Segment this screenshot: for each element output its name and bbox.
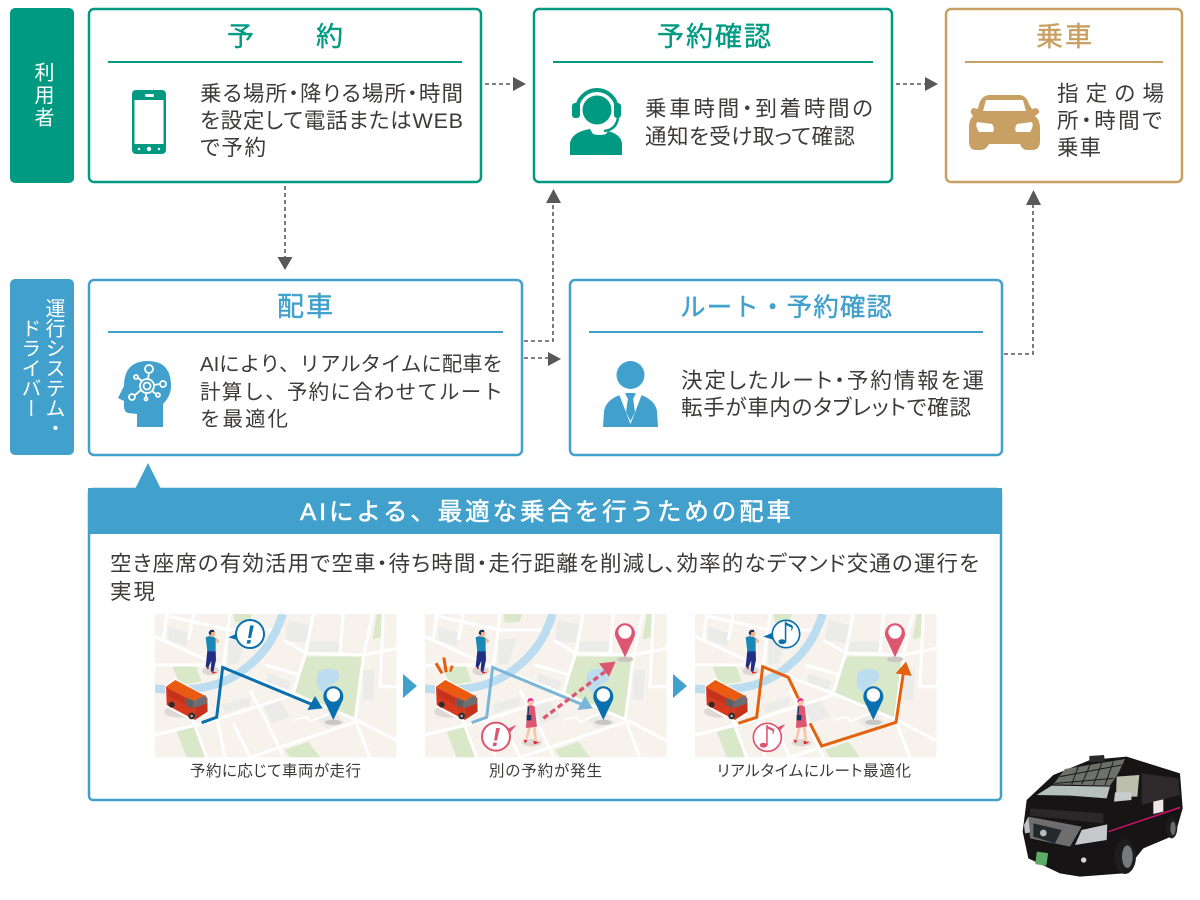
- caption 2: 別の予約が発生: [489, 762, 602, 780]
- heading: 配車: 配車: [277, 292, 333, 322]
- text: 本文: 空き座席の有効活用で空車・待ち時間・走行距離を削減し、効率的なデマンド交通の運行を: [110, 552, 979, 576]
- panel: 予約確認: [534, 9, 892, 182]
- scene 3: リアルタイムにルート最適化: [695, 614, 937, 757]
- heading: 乗車: 乗車: [1036, 22, 1092, 52]
- text: 予約の説明: で予約: [200, 136, 266, 160]
- icon: car: [969, 95, 1040, 150]
- text: ルート説明: 決定したルート・予約情報を運: [681, 369, 984, 393]
- scene 1: 予約に応じて車両が走行: [155, 614, 397, 757]
- panel: 乗車: [946, 9, 1182, 182]
- label: 運行システム・ドライバー: 運行システム・: [42, 298, 65, 438]
- arrow: 予約→配車: [278, 186, 292, 270]
- text: 配車の説明: AIにより、リアルタイムに配車を: [200, 353, 503, 376]
- icon: AI head: [118, 361, 171, 427]
- label: 利用者: [10, 8, 74, 183]
- text: 予約確認の説明: 通知を受け取って確認: [645, 125, 855, 149]
- caption 3: リアルタイムにルート最適化: [717, 762, 911, 780]
- heading: 予約: 予: [227, 22, 254, 52]
- arrow: step 2→3: [673, 674, 687, 698]
- caption 1: 予約に応じて車両が走行: [190, 762, 361, 780]
- panel: 配車: [89, 280, 522, 455]
- heading: 予約: 約: [316, 22, 343, 52]
- heading: AIによる、最適な乗合を行うための配車: AIによる、最適な乗合を行うための配車: [300, 498, 791, 526]
- icon: operator headset: [570, 90, 622, 155]
- text: 乗車の説明: 乗車: [1057, 136, 1101, 160]
- panel: 予約: [89, 9, 481, 182]
- text: 配車の説明: [200, 353, 503, 431]
- heading: ルート・予約確認: ルート・予約確認: [680, 294, 892, 322]
- heading: 予約確認: 予約確認: [657, 22, 771, 52]
- text: 配車の説明: を最適化: [200, 408, 288, 431]
- text: 予約確認の説明: [645, 97, 873, 149]
- text: ルート説明: 転手が車内のタブレットで確認: [681, 396, 971, 420]
- text: 予約の説明: 乗る場所・降りる場所・時間: [200, 82, 463, 106]
- panel: AI配車の説明: [88, 463, 1002, 800]
- arrow: 予約→予約確認: [485, 77, 526, 91]
- text: 乗車の説明: 所・時間で: [1057, 109, 1162, 133]
- icon: smartphone: [132, 90, 166, 154]
- arrow: 配車→予約確認: [524, 189, 561, 341]
- text: 本文: [110, 552, 979, 604]
- text: 本文: 実現: [110, 580, 155, 604]
- scene 2: 別の予約が発生: !: [492, 722, 501, 752]
- scene 3: リアルタイムにルート最適化: ♪: [757, 720, 777, 755]
- icon: driver: [603, 361, 658, 427]
- label: 利用者: 利用者: [31, 62, 54, 130]
- heading: 予約: [227, 22, 343, 52]
- scene 2: 別の予約が発生: [425, 614, 667, 757]
- text: 乗車の説明: [1057, 82, 1164, 160]
- arrow: step 1→2: [403, 674, 417, 698]
- label: 運行システム・ドライバー: ドライバー: [18, 318, 40, 418]
- text: 乗車の説明: 指定の場: [1057, 82, 1164, 106]
- text: 予約の説明: [200, 82, 463, 160]
- text: ルート説明: [681, 369, 984, 420]
- label: 運行システム・ドライバー: [10, 279, 74, 455]
- photo: black minivan: [1023, 755, 1183, 877]
- text: 予約確認の説明: 乗車時間・到着時間の: [645, 97, 873, 121]
- text: 予約の説明: を設定して電話またはWEB: [200, 109, 463, 133]
- arrow: 配車→ルート確認: [524, 352, 561, 366]
- arrow: 予約確認→乗車: [896, 77, 938, 91]
- arrow: ルート確認→乗車: [1004, 190, 1041, 354]
- panel: ルート・予約確認: [570, 280, 1002, 455]
- scene 3: リアルタイムにルート最適化: ♪: [776, 617, 795, 652]
- text: 配車の説明: 計算し、予約に合わせてルート: [200, 381, 503, 404]
- scene 1: 予約に応じて車両が走行: !: [246, 619, 255, 649]
